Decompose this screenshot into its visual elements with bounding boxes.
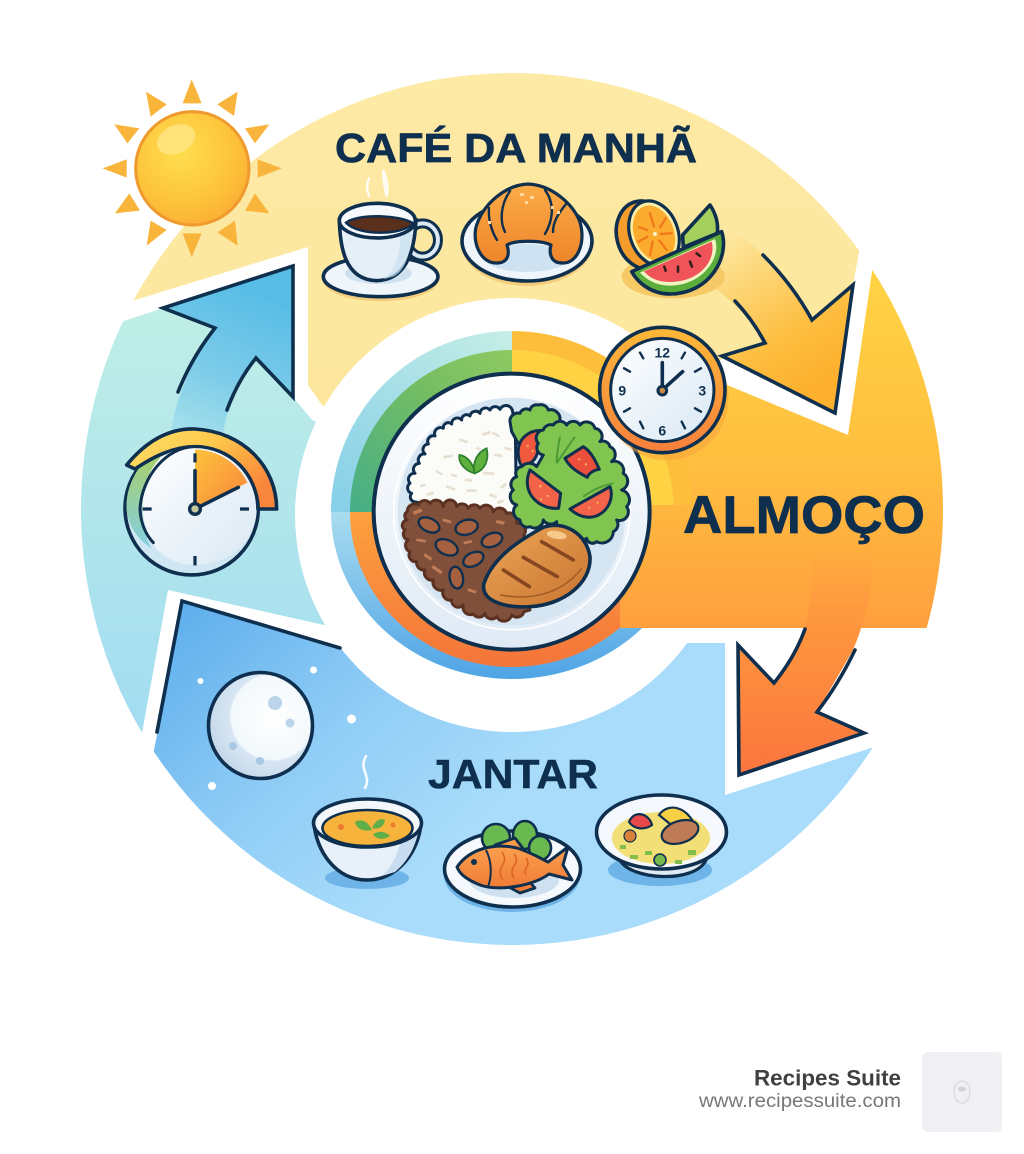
title: lunch: ALMOÇO [683,486,925,545]
icon: lunch clock: 6 [658,422,666,438]
arrow: lunch to dinner [738,552,876,775]
arrow: teal to breakfast [163,266,293,440]
arrow: dinner edge lines [157,601,340,732]
beans [402,500,530,621]
panel: lunch segment [682,270,943,628]
centre white ring [295,298,729,732]
icon: sun [103,79,282,257]
icon: moon and stars [198,666,356,790]
icon: fruit [609,194,725,298]
title: dinner: JANTAR [428,751,598,797]
centre ring chart [331,331,710,679]
panel: afternoon teal segment [81,309,325,732]
text: brand name: Recipes Suite [754,1066,901,1090]
icon: fish on plate [444,821,580,912]
icon: lunch clock: 3 [698,383,706,399]
icon: plate with rice, beans, chicken and salad [374,374,650,650]
icon: lunch clock: 9 [618,383,626,399]
icon: lunch clock: 12 [655,345,670,361]
icon: soup bowl [314,756,422,889]
chicken [484,525,590,607]
text: website: www.recipessuite.com [698,1091,901,1112]
panel: breakfast segment [134,73,860,406]
rice [408,406,517,522]
icon: salad bowl [596,795,726,886]
icon: brand logo box [922,1052,1002,1132]
icon: croissant on plate [462,184,592,286]
arrow: breakfast to lunch [715,225,853,413]
icon: lunch clock [600,327,729,460]
icon: coffee cup [323,170,438,301]
salad [510,405,629,543]
icon: afternoon clock [125,429,277,575]
leaf garnish [459,448,487,473]
title: breakfast: CAFÉ DA MANHÃ [335,125,697,171]
panel: dinner segment [154,603,873,945]
